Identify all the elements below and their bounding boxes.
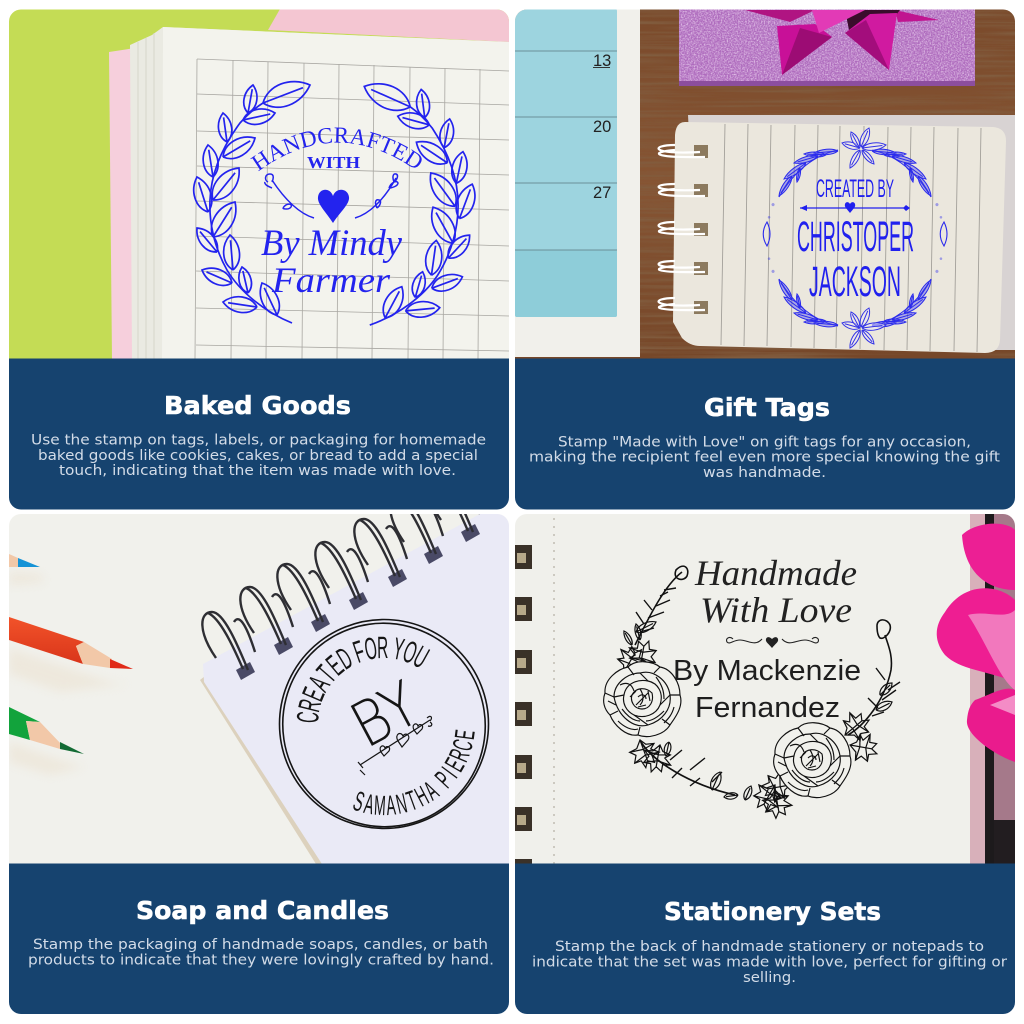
pink flower petals [937, 524, 1015, 762]
stamp text: created for you [296, 636, 430, 722]
stamp text: created for you: A [303, 670, 337, 697]
stamp text: handcrafted with: HANDCRAFTED [250, 128, 422, 172]
stamp text: samantha pierce: H [410, 780, 434, 813]
planner edge on right [970, 514, 1015, 864]
description: gift tags [530, 436, 1000, 477]
heading: baked goods: Baked Goods [164, 391, 351, 420]
stamp: floral frame [763, 127, 947, 350]
stamp text: samantha pierce: M [373, 789, 387, 822]
stamp text: samantha pierce: S [350, 785, 368, 818]
panel: baked goods [9, 10, 509, 510]
description: gift tags: was handmade. [703, 465, 826, 481]
heading: soap and candles: Soap and Candles [136, 896, 389, 925]
stamp: laurel wreath [189, 74, 486, 330]
photo: textured notebook with pink flower [515, 514, 1015, 864]
stamp text: samantha pierce: E [439, 753, 471, 777]
stamp text: created by christoper jackson [798, 179, 914, 296]
photo: spiral notebook and colored pencils [9, 514, 509, 864]
notebook binding holes [515, 545, 532, 864]
stamp text: samantha pierce: I [436, 761, 463, 783]
stamp text: samantha pierce: P [429, 765, 458, 794]
stamp text: created by christoper jackson: CREATED BY [816, 175, 894, 203]
caption band: stationery sets [515, 864, 1015, 1014]
description: soap and candles [28, 937, 494, 968]
colored pencils [9, 554, 133, 775]
stamp text: by mindy farmer: Farmer [271, 260, 391, 300]
calendar: 20 [593, 118, 611, 136]
stamp text: handmade with love: With Love [700, 590, 852, 630]
stamp text: by mackenzie fernandez: Fernandez [695, 692, 840, 724]
calendar: 27 [593, 184, 611, 202]
stamp text: samantha pierce: A [362, 788, 377, 821]
heading: gift tags: Gift Tags [704, 393, 830, 422]
calendar: 13 [593, 52, 611, 70]
spiral notepad [659, 115, 1015, 353]
stamp text: handcrafted with: WITH [307, 153, 360, 172]
stamp text: created for you: C [291, 710, 326, 724]
stamp text: created for you: U [407, 640, 434, 676]
stamp text: created for you: D [332, 642, 359, 677]
description: soap and candles: products to indicate that they were lovingly crafted by hand. [28, 952, 494, 968]
stamp text: samantha pierce: E [449, 728, 481, 741]
stamp text: by mackenzie fernandez: By Mackenzie [673, 655, 861, 687]
stamp text: by mindy farmer: By Mindy [261, 223, 403, 264]
description: gift tags: Stamp "Made with Love" on gift tags for any occasion, [558, 434, 971, 450]
stamp text: created for you: T [311, 660, 343, 689]
stamp text: created for you: R [377, 631, 389, 666]
graph paper grid [195, 59, 509, 359]
photo: wood desk with calendar, gift and spiral notepad [515, 5, 1015, 359]
stamp text: samantha pierce: A [385, 789, 397, 821]
spiral binding [201, 514, 480, 680]
calendar [515, 9, 640, 357]
stamp text: samantha pierce: C [446, 736, 479, 754]
stamp text: created for you: R [293, 696, 329, 715]
caption band: baked goods [9, 358, 509, 510]
stamp text: samantha pierce: A [418, 775, 444, 806]
stamp text: created for you: E [321, 650, 350, 683]
stamp text: samantha pierce: T [402, 784, 421, 817]
heading: stationery sets: Stationery Sets [664, 897, 881, 926]
panel: stationery sets [515, 514, 1015, 1014]
stamp text: created for you: F [349, 635, 369, 670]
description: baked goods: touch, indicating that the item was made with love. [59, 463, 456, 479]
description: stationery sets: indicate that the set was made with love, perfect for gifting or [532, 954, 1007, 970]
stamp: heart with sprigs [265, 174, 398, 223]
stamp: arrow with hearts [358, 716, 432, 775]
stamp text: samantha pierce: N [393, 787, 410, 820]
panel: gift tags [515, 5, 1015, 510]
glitter gift box [679, 5, 975, 86]
description: baked goods [31, 432, 486, 479]
stamp text: created for you: Y [390, 632, 407, 668]
stamp: flourish with heart [727, 637, 818, 648]
stamp text: created by christoper jackson: JACKSON [809, 258, 901, 306]
description: soap and candles: Stamp the packaging of handmade soaps, candles, or bath [33, 937, 488, 953]
pink bow [745, 10, 939, 75]
description: gift tags: making the recipient feel even more special knowing the gift [529, 450, 1000, 466]
panel: soap and candles [9, 474, 522, 1014]
stamp text: created for you: E [297, 683, 332, 706]
notebook page [200, 677, 322, 864]
description: baked goods: Use the stamp on tags, labels, or packaging for homemade [31, 432, 486, 448]
stamp: double circle frame [278, 618, 490, 830]
caption band: soap and candles [9, 864, 509, 1014]
description: baked goods: baked goods like cookies, cakes, or bread to add a special [38, 448, 478, 464]
description: stationery sets: selling. [743, 970, 796, 986]
stamp: rose wreath [604, 566, 900, 820]
description: stationery sets [532, 939, 1007, 986]
description: stationery sets: Stamp the back of handmade stationery or notepads to [555, 939, 984, 955]
stamp text: handmade with love: Handmade [694, 553, 857, 593]
photo: notebook with blue wreath stamp [9, 10, 509, 358]
caption band: gift tags [515, 358, 1015, 510]
stamp text: samantha pierce [353, 730, 475, 816]
stamp text: by mindy farmer [261, 229, 402, 292]
stamp text: created for you: O [398, 635, 421, 671]
stamp text: handmade with love [694, 553, 857, 630]
stamp text: by: BY [339, 667, 431, 762]
stamp text: samantha pierce: R [443, 744, 476, 766]
stamp text: created for you: O [362, 632, 380, 668]
stamp text: by mackenzie fernandez [673, 655, 861, 724]
